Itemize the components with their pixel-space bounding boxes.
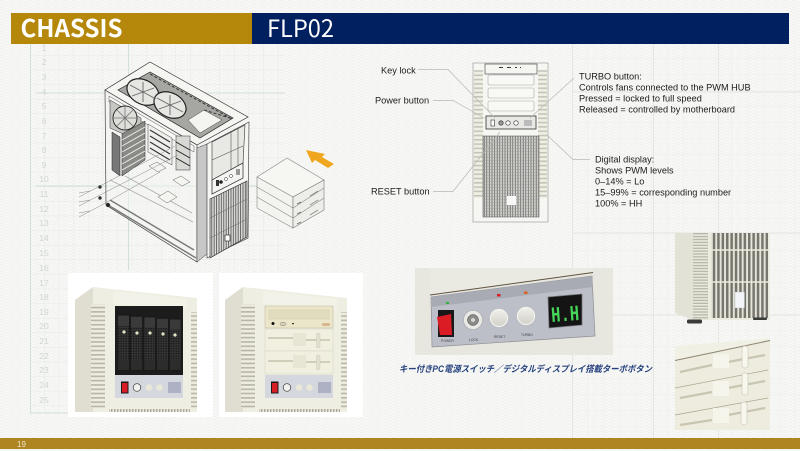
chassis: top panel with fans [105, 62, 248, 145]
key lock: LOCK [469, 338, 479, 342]
ruler numbers: 1 [42, 43, 47, 53]
background: left ruled grid [30, 44, 285, 413]
chassis: front frame [207, 122, 249, 258]
reset button: RESET [494, 335, 505, 339]
text: digital display description: 15–99% = corresponding number [595, 188, 731, 198]
text: turbo button description: Pressed = locked to full speed [579, 94, 702, 104]
text: turbo button description [579, 72, 751, 114]
ruler numbers: 5 [42, 101, 47, 111]
text: digital display description: Shows PWM levels [595, 166, 674, 176]
ruler numbers: 4 [42, 87, 47, 97]
ruler numbers: 12 [39, 204, 49, 214]
chassis: side opening outline [105, 90, 197, 262]
reset button [490, 294, 508, 339]
optical drive [265, 306, 333, 328]
front view: top bay [485, 64, 537, 74]
feet [687, 318, 767, 324]
arrow: orange insertion arrow [306, 150, 334, 168]
ruler numbers: 19 [39, 307, 49, 317]
photo: floppy bay close-up [675, 338, 770, 430]
photo: control panel close-up [415, 268, 613, 355]
footer bar with page number: 19 [17, 440, 26, 449]
control panel [115, 375, 183, 398]
chassis: expansion slots [112, 121, 145, 176]
background: right grid [572, 44, 800, 438]
header: model name [252, 9, 789, 44]
control panel [265, 375, 333, 398]
ruler numbers: 16 [39, 263, 49, 273]
black drive trays [115, 306, 183, 375]
key lock [464, 310, 482, 342]
chassis: rear fan [110, 100, 141, 142]
header: chassis section: CHASSIS [20, 9, 123, 44]
ruler numbers: 7 [42, 131, 47, 141]
ruler numbers: 20 [39, 321, 49, 331]
ruler numbers [39, 43, 49, 405]
ruler numbers: 6 [42, 116, 47, 126]
header bar [11, 9, 789, 44]
power led [446, 302, 449, 304]
footer bar with page number [0, 438, 800, 449]
exploded chassis diagram [79, 62, 249, 262]
ruler numbers: 3 [42, 72, 47, 82]
turbo button: TURBO [521, 333, 533, 337]
ruler numbers: 21 [39, 336, 49, 346]
floppy drives [265, 329, 333, 374]
case body [75, 287, 197, 412]
power switch: POWER [441, 339, 454, 343]
ruler numbers: 13 [39, 218, 49, 228]
caption: japanese feature text: キー付きPC電源スイッチ／デジタルディスプレイ搭載ターボボタン [399, 364, 653, 374]
ruler numbers: 24 [39, 380, 49, 390]
text: digital display description: 0–14% = Lo [595, 176, 644, 186]
front view: side vents [474, 70, 547, 198]
text: turbo button description: Released = controlled by motherboard [579, 104, 735, 114]
ruler numbers: 8 [42, 145, 47, 155]
ruler numbers: 2 [42, 57, 47, 67]
ruler numbers: 23 [39, 365, 49, 375]
ruler numbers: 11 [40, 189, 49, 199]
chassis: motherboard slots [148, 124, 190, 170]
label: power button: Power button [375, 96, 429, 106]
text: turbo button description: TURBO button: [579, 72, 642, 82]
chassis: drive bay window [212, 125, 245, 180]
chassis: control plate [212, 163, 243, 194]
leader lines [418, 70, 590, 192]
chassis: front mesh grill [210, 181, 247, 258]
ruler numbers: 17 [39, 278, 49, 288]
ruler numbers: 25 [39, 395, 49, 405]
ruler numbers: 15 [39, 248, 49, 258]
text: turbo button description: Controls fans connected to the PWM HUB [579, 82, 751, 92]
front view: control panel [486, 116, 536, 129]
photo: case with optical and floppy drives [219, 273, 363, 417]
panel plate [431, 276, 595, 347]
front view: outer case [473, 63, 548, 222]
text: digital display description: Digital display: [595, 154, 654, 164]
ruler numbers: 9 [42, 160, 47, 170]
chassis: screws [79, 146, 178, 217]
ruler numbers: 14 [39, 233, 49, 243]
digital display [548, 294, 582, 329]
chassis: floor cutouts [149, 162, 190, 203]
photo: case with hot-swap drive trays [68, 273, 213, 417]
text: digital display description: 100% = HH [595, 198, 642, 208]
drive cages [257, 158, 324, 228]
chassis: front strip [197, 144, 207, 262]
digital display: H.H [550, 302, 580, 329]
ruler numbers: 10 [39, 174, 49, 184]
front view: drive bays [488, 75, 534, 111]
power switch [437, 310, 454, 343]
badge [735, 292, 744, 308]
front view line drawing [473, 63, 548, 222]
header: model name: FLP02 [267, 9, 334, 44]
header: chassis section [11, 9, 252, 44]
photo: case side with front grill [675, 233, 770, 324]
text: digital display description [595, 154, 731, 208]
drive faces [675, 370, 768, 415]
ruler numbers: 18 [39, 292, 49, 302]
case body [225, 287, 347, 412]
ruler numbers: 22 [39, 351, 49, 361]
turbo button [518, 292, 534, 337]
label: key lock: Key lock [381, 66, 416, 76]
front view: mesh grill [483, 136, 539, 217]
label: reset button: RESET button [371, 186, 430, 196]
